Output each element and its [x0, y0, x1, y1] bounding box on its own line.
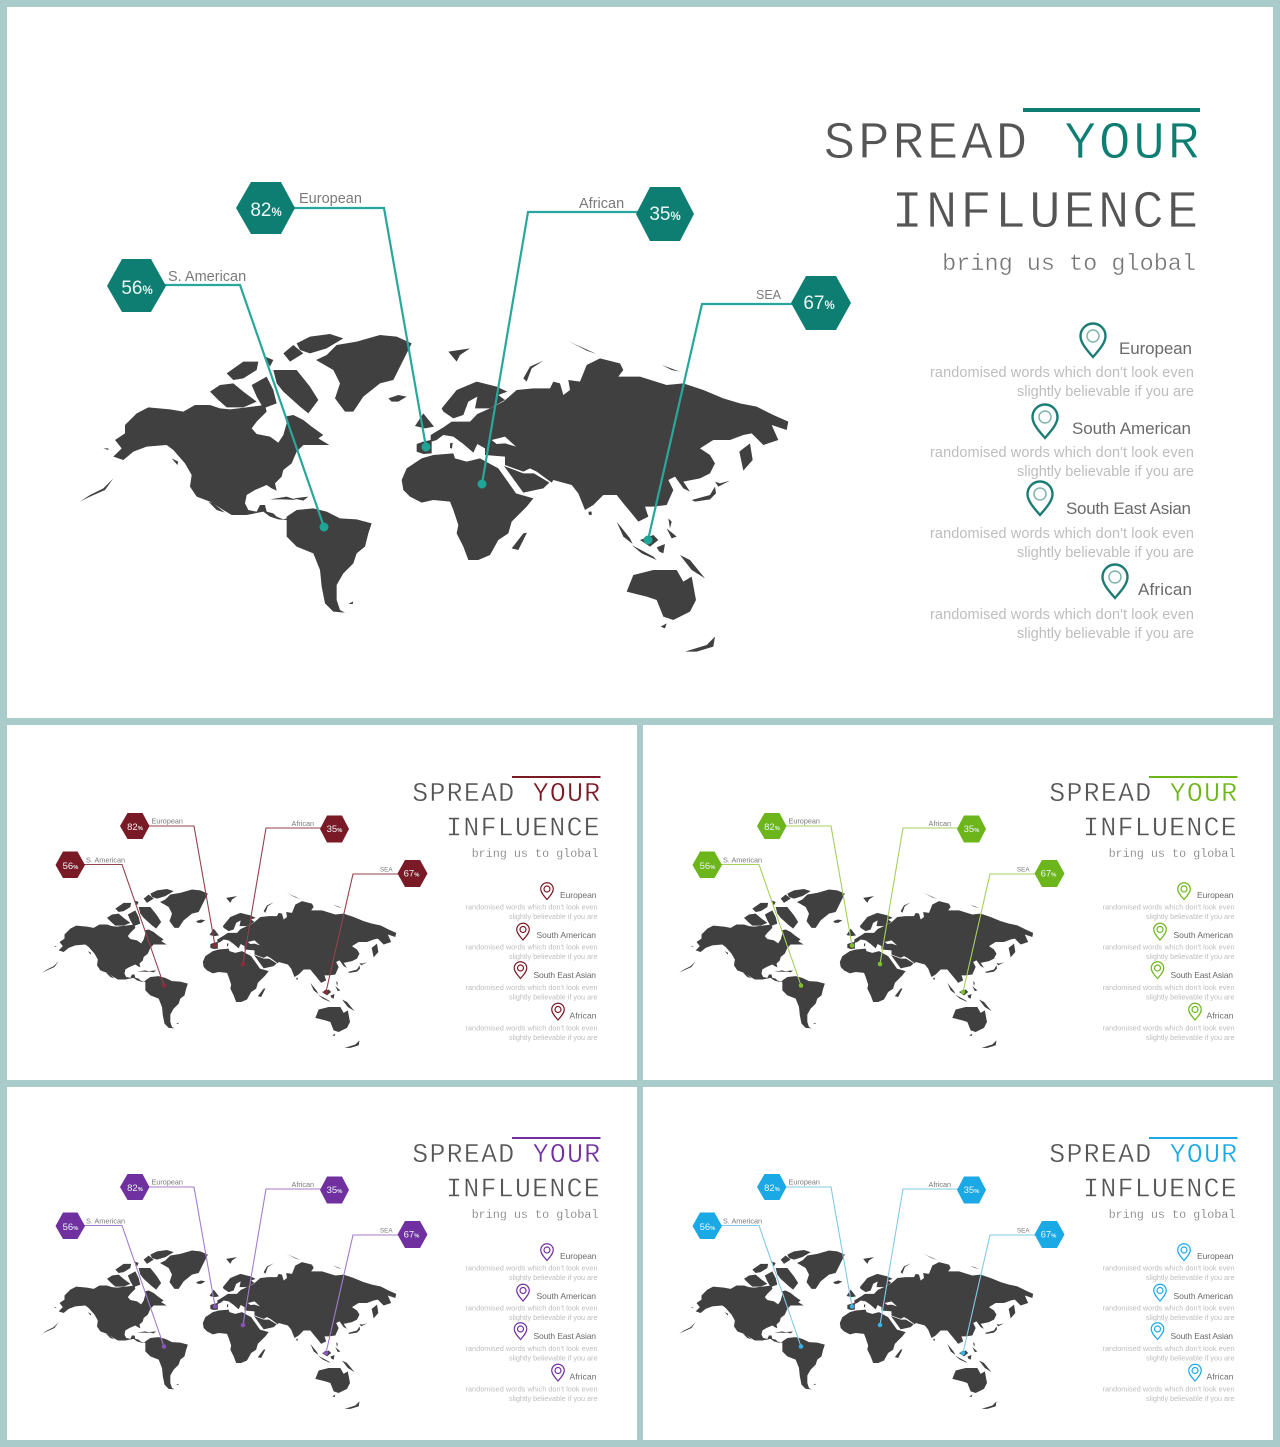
connector lines and dots [82, 826, 400, 994]
legend: European: randomised words which don't look even [930, 365, 1194, 381]
panel: purple slide [7, 1087, 637, 1440]
hexagons: 35% [964, 824, 979, 835]
legend: slightly believable if you are [1146, 1033, 1234, 1042]
map labels: SEA [756, 288, 782, 302]
panel: green slide [643, 725, 1273, 1080]
legend: slightly believable if you are [509, 992, 598, 1002]
hexagons: 56% [63, 861, 78, 872]
hexagon: 35% [636, 187, 694, 241]
hexagon: 56%: 56% [121, 278, 153, 299]
legend: European [1197, 890, 1234, 900]
title [1049, 776, 1238, 861]
world map [679, 1250, 1033, 1409]
panel: blue slide [643, 1087, 1273, 1440]
legend: African [930, 564, 1194, 642]
map labels: African [579, 196, 624, 212]
legend [466, 1244, 598, 1403]
legend: randomised words which don't look even [1102, 1304, 1234, 1312]
hexagons: 67% [1041, 868, 1056, 880]
hexagon: 67%: 67% [803, 293, 835, 314]
hexagons: 67% [404, 868, 419, 880]
title: INFLUENCE [1083, 1174, 1238, 1204]
legend: European [560, 1251, 597, 1261]
title: bring us to global [942, 251, 1196, 278]
legend: African [1206, 1372, 1234, 1382]
hexagons: 67% [404, 1230, 419, 1240]
title: SPREAD YOUR [824, 114, 1202, 174]
title: INFLUENCE [446, 1174, 601, 1204]
map labels: European [299, 191, 362, 207]
legend: South American: South American [1072, 419, 1191, 438]
legend: South East Asian [1170, 970, 1233, 980]
title: bring us to global [1109, 1208, 1236, 1222]
hexagons [692, 813, 1064, 887]
hexagon: 56% [107, 259, 166, 312]
map labels [86, 1178, 393, 1234]
panel: main slide (teal) [7, 7, 1273, 718]
map labels [86, 816, 393, 874]
map labels [168, 191, 782, 302]
hexagon: 82% [236, 182, 295, 234]
legend: South East Asian [1170, 1331, 1233, 1341]
connector lines and dots [719, 1187, 1036, 1355]
title: SPREAD YOUR [1049, 779, 1238, 809]
world map [679, 889, 1033, 1048]
map labels: European [788, 1178, 820, 1186]
legend: European [1197, 1251, 1234, 1261]
connector lines and dots [160, 208, 795, 544]
legend: South American: randomised words which don't look even [930, 445, 1194, 461]
legend: slightly believable if you are [1146, 1313, 1234, 1322]
legend: European [560, 890, 597, 900]
hexagons: 35% [327, 1185, 342, 1196]
map labels: S. American [723, 1216, 762, 1226]
legend: slightly believable if you are [509, 952, 598, 961]
legend: slightly believable if you are [509, 1354, 598, 1362]
title: bring us to global [472, 847, 598, 861]
legend: randomised words which don't look even [1102, 942, 1234, 952]
legend: African: randomised words which don't look even [930, 607, 1194, 623]
legend: randomised words which don't look even [466, 1264, 598, 1272]
legend: randomised words which don't look even [466, 1304, 598, 1312]
legend: randomised words which don't look even [1102, 1264, 1234, 1272]
legend: randomised words which don't look even [1102, 1024, 1234, 1032]
hexagons [56, 813, 428, 887]
title: bring us to global [1109, 847, 1236, 861]
world map [80, 334, 788, 652]
panel: maroon slide [7, 725, 637, 1080]
legend: slightly believable if you are [1146, 1273, 1234, 1282]
title: INFLUENCE [1083, 814, 1238, 844]
legend: randomised words which don't look even [466, 1024, 598, 1032]
hexagons: 35% [964, 1185, 979, 1196]
legend: African [1206, 1010, 1234, 1020]
legend: European: European [1119, 339, 1192, 358]
legend: slightly believable if you are [509, 1273, 598, 1282]
title [1049, 1137, 1238, 1222]
map labels [723, 1178, 1030, 1234]
legend: South American [1174, 1291, 1233, 1301]
legend: randomised words which don't look even [466, 1384, 598, 1394]
legend: African [570, 1010, 597, 1020]
map labels: S. American [168, 269, 246, 285]
legend: South American [930, 404, 1194, 480]
map labels [723, 816, 1030, 874]
hexagons: 82% [127, 822, 143, 833]
title [824, 108, 1202, 278]
hexagons: 56% [700, 861, 715, 872]
title [412, 776, 602, 861]
legend: South American [536, 1291, 596, 1301]
map labels: SEA [1017, 1228, 1030, 1234]
title [412, 1137, 602, 1222]
hexagons: 56% [63, 1222, 78, 1233]
legend: randomised words which don't look even [466, 942, 598, 952]
title: bring us to global [472, 1208, 598, 1222]
map labels: S. American [86, 856, 125, 864]
connector lines and dots [82, 1187, 400, 1355]
hexagons: 82% [764, 822, 780, 833]
legend: South East Asian [534, 1331, 596, 1341]
legend: South East Asian [930, 482, 1194, 561]
map labels: European [152, 816, 183, 826]
legend: slightly believable if you are [509, 1033, 598, 1042]
legend: South American [536, 930, 596, 940]
legend: randomised words which don't look even [1102, 1344, 1234, 1353]
legend: randomised words which don't look even [466, 1344, 598, 1353]
legend [1102, 883, 1234, 1042]
world map [42, 889, 396, 1048]
legend: slightly believable if you are [509, 1313, 598, 1322]
map labels: S. American [86, 1216, 125, 1226]
legend: African: slightly believable if you are [1017, 626, 1194, 642]
map labels: European [152, 1178, 183, 1186]
legend: randomised words which don't look even [1102, 902, 1234, 912]
legend: African [570, 1372, 597, 1382]
legend: South East Asian: South East Asian [1066, 499, 1191, 518]
hexagon: 82%: 82% [250, 200, 282, 221]
map labels: African [928, 1180, 951, 1189]
hexagons [56, 1174, 428, 1248]
hexagon: 35%: 35% [649, 204, 681, 225]
legend: randomised words which don't look even [1102, 1384, 1234, 1394]
title: SPREAD YOUR [412, 779, 602, 809]
legend: slightly believable if you are [509, 1394, 598, 1403]
title: INFLUENCE [891, 183, 1201, 243]
connector lines and dots [719, 826, 1036, 994]
legend: slightly believable if you are [509, 912, 598, 921]
map labels: SEA [380, 866, 393, 874]
legend: South East Asian: randomised words which don't look even [930, 526, 1194, 542]
hexagons: 82% [127, 1183, 143, 1194]
legend: African: African [1138, 580, 1192, 599]
hexagons: 56% [700, 1222, 715, 1233]
map labels: African [928, 819, 951, 828]
hexagon: 67% [791, 276, 851, 330]
title: INFLUENCE [446, 814, 601, 844]
legend: European: slightly believable if you are [1017, 384, 1194, 400]
map labels: European [788, 816, 820, 826]
map labels: African [292, 819, 314, 828]
legend: randomised words which don't look even [1102, 983, 1234, 992]
legend: South American: slightly believable if you are [1017, 464, 1194, 480]
map labels: SEA [1017, 866, 1030, 874]
legend: randomised words which don't look even [466, 983, 598, 992]
hexagons [692, 1174, 1064, 1248]
map labels: S. American [723, 856, 762, 864]
legend: randomised words which don't look even [466, 902, 598, 912]
legend: South East Asian: slightly believable if you are [1017, 545, 1194, 561]
legend: slightly believable if you are [1146, 912, 1234, 921]
title: SPREAD YOUR [412, 1140, 602, 1170]
legend: slightly believable if you are [1146, 992, 1234, 1002]
legend: European [930, 324, 1194, 400]
title: SPREAD YOUR [1049, 1140, 1238, 1170]
map labels: African [292, 1180, 314, 1189]
legend: slightly believable if you are [1146, 952, 1234, 961]
legend: slightly believable if you are [1146, 1354, 1234, 1362]
world map [42, 1250, 396, 1409]
legend [466, 883, 598, 1042]
map labels: SEA [380, 1228, 393, 1234]
hexagons: 35% [327, 824, 342, 835]
legend: slightly believable if you are [1146, 1394, 1234, 1403]
legend: South American [1174, 930, 1233, 940]
hexagons: 67% [1041, 1230, 1056, 1240]
legend [1102, 1244, 1234, 1403]
legend: South East Asian [534, 970, 596, 980]
hexagons: 82% [764, 1183, 780, 1194]
